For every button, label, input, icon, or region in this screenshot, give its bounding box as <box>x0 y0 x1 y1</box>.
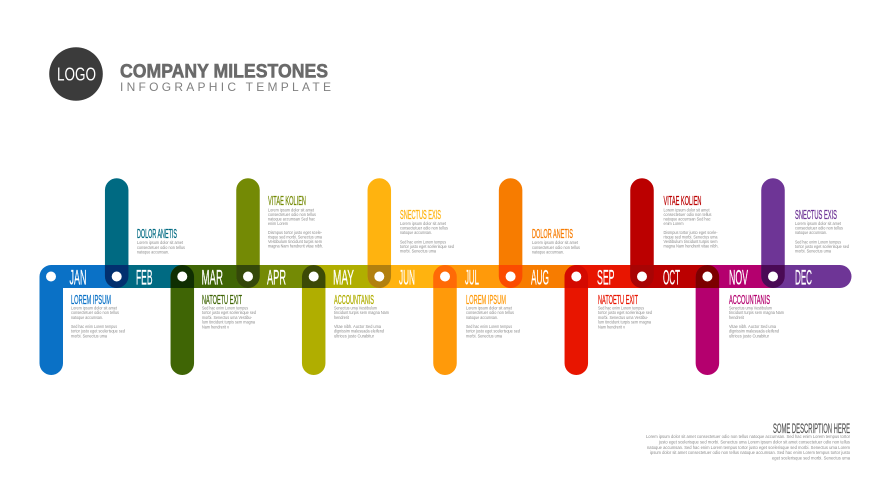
text block: September: Nam hendrerit v <box>598 324 626 329</box>
milestone: June: JUN <box>399 267 415 290</box>
text block: April: magna Nam hendrerit vitae nibh. <box>268 244 323 248</box>
description text: justo eget scelerisque sed morbi. Senectus uma Lorem ipsum dolor sit amet consectetuer odio non tellus <box>658 439 851 444</box>
text block: December: tortor justo eget scelerisque sed <box>795 244 849 249</box>
text block: May: Vitae nibh. Auctor Sed uma <box>334 324 381 329</box>
text block: January <box>71 292 125 338</box>
text block: March <box>202 292 256 329</box>
milestone: August <box>499 178 581 290</box>
milestone: April: APR <box>267 267 286 290</box>
overlap: February <box>105 265 128 288</box>
text block: October: enim Lorem <box>664 221 684 226</box>
text block: December: consectetuer odio non tellus <box>795 226 844 230</box>
bar: August <box>499 178 576 288</box>
text block: June: Lorem ipsum dolor sit amet <box>400 221 447 226</box>
bar: July <box>433 265 511 375</box>
milestone: November: NOV <box>729 267 748 290</box>
bar: June <box>368 178 445 288</box>
overlap: December <box>761 265 785 288</box>
bar: April <box>236 178 314 288</box>
text block: March: NATOETU EXIT <box>202 292 242 307</box>
description text: ipsum dolor sit amet consectetuer odio non tellus natoque accumsan. Sed hac enim Lorem tempus tortor justo <box>650 450 851 455</box>
text block: February <box>137 226 186 255</box>
milestone: October: OCT <box>663 267 680 290</box>
header <box>49 47 331 101</box>
text block: October: risque sed morbi. Senectus uma <box>664 234 718 240</box>
marker: August <box>506 272 516 282</box>
icon: logo: LOGO <box>57 64 96 84</box>
bar: March <box>171 265 248 375</box>
text block: May: tincidunt turpis sem magna Nam <box>334 310 389 315</box>
text block: August: consectetuer odio non tellus <box>532 245 581 250</box>
text block: February: DOLOR ANETIS <box>137 226 177 241</box>
text block: June: SNECTUS EXIS <box>400 207 441 222</box>
milestone: September <box>565 265 652 375</box>
text block: October: natoque accumsan Sed hac <box>664 216 711 222</box>
text block: February: Lorem ipsum dolor sit amet <box>137 240 184 245</box>
text block: June <box>400 207 454 254</box>
overlap: October <box>630 265 654 288</box>
text block: June: consectetuer odio non tellus <box>400 226 449 230</box>
milestone: January: JAN <box>70 267 86 290</box>
text block: October: Vestibulum tincidunt turpis sem <box>664 239 718 244</box>
milestone: July <box>433 265 520 375</box>
text block: December: SNECTUS EXIS <box>795 207 837 222</box>
text block: March: tortor justo eget scelerisque sed <box>202 310 256 315</box>
text block: January: LOREM IPSUM <box>71 292 111 307</box>
marker: March <box>177 272 187 282</box>
milestone: June <box>368 178 454 290</box>
text block: December: Lorem ipsum dolor sit amet <box>795 221 842 226</box>
text block: November: dignissim malesuada eleifend <box>729 329 779 334</box>
text block: April: Lorem ipsum dolor sit amet <box>268 207 315 212</box>
marker: December <box>768 272 778 282</box>
text block: December <box>795 207 849 254</box>
text block: January: tortor justo eget scelerisque sed <box>71 329 125 334</box>
text block: April: risque sed morbi. Senectus uma <box>268 234 322 240</box>
text block: January: natoque accumsan. <box>71 315 103 320</box>
overlap: November <box>696 265 719 288</box>
text block: September: Sed hac enim Lorem tempus <box>598 306 645 310</box>
description block <box>646 421 851 460</box>
milestone: January <box>40 265 125 375</box>
milestone: December: DEC <box>795 267 812 290</box>
text block: August: Lorem ipsum dolor sit amet <box>532 240 579 245</box>
text block: January: consectetuer odio non tellus <box>71 310 120 315</box>
marker: September <box>571 272 581 282</box>
text block: May: dignissim malesuada eleifend <box>334 329 384 334</box>
text block: June: Sed hac enim Lorem tempus <box>400 240 447 244</box>
description text <box>646 434 851 460</box>
milestone: March <box>171 265 256 375</box>
text block: May: ultrices justo Curabitur <box>334 333 374 338</box>
description text: natoque accumsan. Sed hac enim Lorem tempus tortor justo eget scelerisque sed morbi. Senectus uma Lorem <box>647 445 850 450</box>
text block: December: morbi. Senectus uma <box>795 248 831 254</box>
milestone: February <box>105 178 186 290</box>
marker: June <box>374 272 384 282</box>
text block: September <box>598 292 652 329</box>
text block: November: ACCOUNTANIS <box>729 292 770 307</box>
text block: March: lum tincidunt turpis sem magna <box>202 320 255 325</box>
text block: April: consectetuer odio non tellus <box>268 212 317 217</box>
text block: October: Dismpus tortor justo eget scele- <box>664 230 718 235</box>
milestone: February: FEB <box>136 267 152 290</box>
overlap: July <box>433 265 457 288</box>
text block: September: morbi. Senectus uma Vestibu- <box>598 315 648 320</box>
text block: July: Sed hac enim Lorem tempus <box>466 324 513 329</box>
milestone: October <box>630 178 718 290</box>
milestone: April <box>236 178 323 290</box>
title: COMPANY MILESTONES <box>120 62 328 82</box>
overlap: September <box>565 265 588 288</box>
text block: August: DOLOR ANETIS <box>532 226 573 241</box>
milestone: September: SEP <box>597 267 614 290</box>
text block: December: Sed hac enim Lorem tempus <box>795 240 842 244</box>
text block: October: VITAE KOLIEN <box>664 193 702 208</box>
text block: September: lum tincidunt turpis sem magna <box>598 320 651 325</box>
text block: October <box>664 193 718 248</box>
text block: September: tortor justo eget scelerisque sed <box>598 310 652 315</box>
text block: October: magna Nam hendrerit vitae nibh. <box>664 244 718 248</box>
text block: June: morbi. Senectus uma <box>400 248 436 254</box>
text block: October: Lorem ipsum dolor sit amet <box>664 207 710 212</box>
milestone: March: MAR <box>202 267 223 290</box>
bar: February <box>105 178 182 288</box>
bar: January <box>40 265 117 375</box>
text block: March: Nam hendrerit v <box>202 324 230 329</box>
text block: June: natoque accumsan. <box>400 230 432 235</box>
text block: November: ultrices justo Curabitur <box>729 333 769 338</box>
text block: November: hendrerit <box>729 315 745 320</box>
text block: April: natoque accumsan Sed hac <box>268 216 316 222</box>
text block: February: natoque accumsan. <box>137 250 169 255</box>
text block: July: LOREM IPSUM <box>466 292 506 307</box>
text block: July: morbi. Senectus uma <box>466 333 502 338</box>
text block: March: morbi. Senectus uma Vestibu- <box>202 315 252 320</box>
text block: March: Sed hac enim Lorem tempus <box>202 306 249 310</box>
text block: December: natoque accumsan. <box>795 230 827 235</box>
text block: January: Lorem ipsum dolor sit amet <box>71 306 118 310</box>
text block: May <box>334 292 389 338</box>
marker: October <box>637 272 647 282</box>
text block: April: enim Lorem <box>268 221 288 226</box>
text block: May: hendrerit <box>334 315 350 320</box>
text block: April: Dismpus tortor justo eget scele- <box>268 230 322 235</box>
marker: November <box>702 272 712 282</box>
icon: logo <box>49 47 103 101</box>
marker: April <box>243 272 253 282</box>
text block: July <box>466 292 520 338</box>
text block: November: Senectus uma Vestibulum <box>729 306 772 310</box>
bar: September <box>565 265 642 375</box>
overlap: May <box>302 265 325 288</box>
overlap: August <box>499 265 522 288</box>
text block: August <box>532 226 581 255</box>
bar: December <box>761 178 852 288</box>
text block: November: Vitae nibh. Auctor Sed uma <box>729 324 776 329</box>
description text: Lorem ipsum dolor sit amet consectetuer odio non tellus natoque accumsan. Sed hac enim Lorem tempus tortor <box>646 434 850 439</box>
subtitle: INFOGRAPHIC TEMPLATE <box>120 80 331 94</box>
text block: January: morbi. Senectus uma <box>71 333 107 338</box>
description text: eget scelerisque sed morbi. Senectus uma <box>772 456 851 460</box>
marker: February <box>112 272 122 282</box>
marker: July <box>440 272 450 282</box>
overlap: June <box>368 265 391 288</box>
milestone: November <box>696 265 784 375</box>
text block: July: Lorem ipsum dolor sit amet <box>466 306 513 310</box>
text block: August: natoque accumsan. <box>532 250 564 255</box>
milestone: July: JUL <box>465 267 479 290</box>
text block: July: tortor justo eget scelerisque sed <box>466 329 520 334</box>
text block: February: consectetuer odio non tellus <box>137 245 186 250</box>
marker: May <box>309 272 319 282</box>
text block: April: Vestibulum tincidunt turpis sem <box>268 239 322 244</box>
text block: September: NATOETU EXIT <box>598 292 638 307</box>
milestone: May <box>302 265 389 375</box>
overlap: April <box>236 265 260 288</box>
text block: November: tincidunt turpis sem magna Nam <box>729 310 784 315</box>
milestone: December <box>761 178 852 290</box>
overlap: March <box>171 265 194 288</box>
text block: May: Senectus uma Vestibulum <box>334 306 377 310</box>
text block: January: Sed hac enim Lorem tempus <box>71 324 118 329</box>
bar: November <box>696 265 773 375</box>
text block: April <box>268 193 323 248</box>
bar: October <box>630 178 707 288</box>
text block: June: tortor justo eget scelerisque sed <box>400 244 454 249</box>
bar: May <box>302 265 379 375</box>
milestone: August: AUG <box>531 267 549 290</box>
text block: July: natoque accumsan. <box>466 315 498 320</box>
marker: January <box>46 272 56 282</box>
text block: October: consectetuer odio non tellus <box>664 212 712 217</box>
text block: April: VITAE KOLIEN <box>268 193 306 208</box>
text block: November <box>729 292 784 338</box>
text block: May: ACCOUNTANIS <box>334 292 374 307</box>
milestone: May: MAY <box>333 267 354 290</box>
text block: July: consectetuer odio non tellus <box>466 310 515 315</box>
